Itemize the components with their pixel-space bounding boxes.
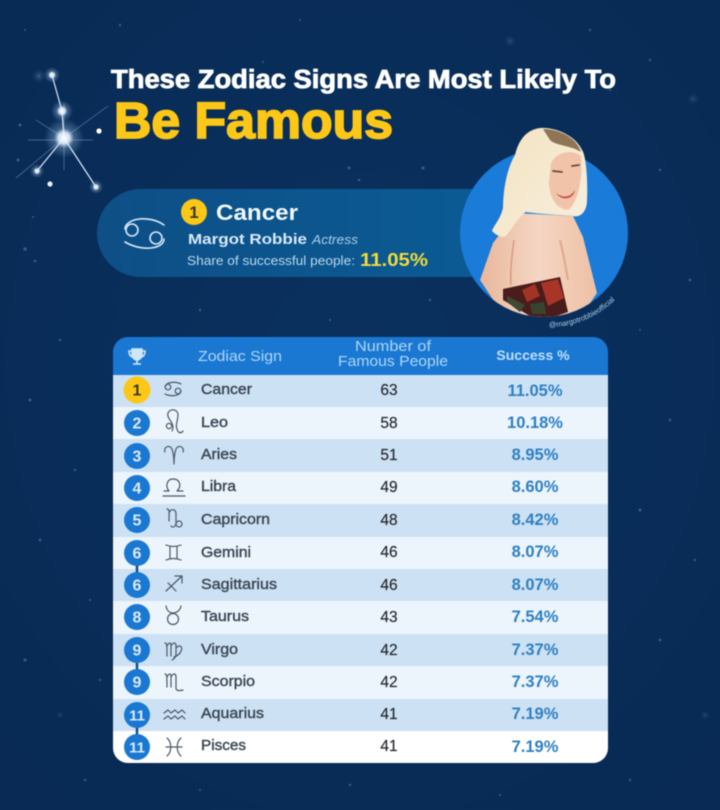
row: scorpio: Scorpio <box>201 674 255 690</box>
icon: trophy <box>129 349 145 364</box>
row: virgo: Virgo <box>201 642 238 658</box>
row: capricorn: Capricorn <box>201 512 270 528</box>
row: capricorn: 5 <box>133 512 142 530</box>
row: cancer: 11.05% <box>507 382 563 400</box>
title line 2: Be Famous <box>114 92 393 149</box>
row: aquarius: 41 <box>380 706 398 723</box>
row: cancer <box>124 376 563 404</box>
row: sagittarius: Sagittarius <box>201 577 277 593</box>
row: gemini: 8.07% <box>512 543 559 561</box>
row: aquarius: Aquarius <box>201 706 264 722</box>
panel: featured sign <box>97 189 517 277</box>
row: capricorn <box>124 507 559 533</box>
face <box>549 152 581 210</box>
row: pisces: 11 <box>129 740 145 756</box>
row: leo: 58 <box>380 415 398 432</box>
row: sagittarius: 46 <box>380 577 398 594</box>
row: aries <box>124 443 559 469</box>
row: leo: 10.18% <box>507 414 563 432</box>
row: taurus: 7.54% <box>512 608 559 626</box>
row: taurus: Taurus <box>201 609 249 625</box>
row: libra: 8.60% <box>512 478 559 496</box>
sign name: Cancer <box>216 200 298 225</box>
title line 1: These Zodiac Signs Are Most Likely To <box>111 66 616 94</box>
row: virgo <box>124 637 559 663</box>
shoulders and dress <box>480 213 597 325</box>
row: aries: Aries <box>201 447 237 463</box>
row: aries: 51 <box>380 447 398 464</box>
header: number of famous people: Number of <box>355 338 432 355</box>
row: capricorn: 8.42% <box>512 511 559 529</box>
row: aries: 3 <box>133 448 142 466</box>
row: scorpio: 42 <box>380 674 398 691</box>
hair <box>492 128 587 237</box>
row: libra: 4 <box>133 480 142 498</box>
row: pisces: 7.19% <box>512 738 559 756</box>
row: virgo: 42 <box>380 642 398 659</box>
row: gemini: Gemini <box>201 545 251 561</box>
share label: Share of successful people: <box>187 253 355 268</box>
table header <box>113 337 608 375</box>
icon: constellation <box>16 67 108 194</box>
row: sagittarius: 6 <box>133 578 142 594</box>
table <box>113 337 608 763</box>
header: success: Success % <box>496 347 570 363</box>
row: sagittarius: 8.07% <box>512 576 559 594</box>
table rows <box>113 337 608 763</box>
person role: Actress <box>311 233 358 247</box>
person name: Margot Robbie <box>188 232 307 248</box>
header: zodiac sign: Zodiac Sign <box>198 349 282 365</box>
hair roots <box>543 129 581 152</box>
row: libra <box>124 475 559 501</box>
row: aquarius <box>124 702 559 728</box>
row: pisces: Pisces <box>201 738 246 754</box>
portrait <box>460 127 629 329</box>
row: pisces: 41 <box>380 738 398 755</box>
icon: cancer <box>125 219 164 248</box>
row: libra: 49 <box>380 479 398 496</box>
row: cancer: Cancer <box>201 382 252 398</box>
row: gemini: 46 <box>380 544 398 561</box>
row: aries: 8.95% <box>512 446 559 464</box>
row: gemini <box>124 540 559 566</box>
row: virgo: 7.37% <box>512 641 559 659</box>
row: taurus <box>124 604 559 630</box>
photo handle: @margotrobbieofficial <box>548 296 615 329</box>
row: taurus: 8 <box>133 610 142 626</box>
row: scorpio: 9 <box>133 674 142 692</box>
row: cancer: 63 <box>380 382 398 399</box>
rank badge: 1 <box>189 203 199 222</box>
row: pisces <box>124 734 559 760</box>
row: aquarius: 7.19% <box>512 705 559 723</box>
row: leo <box>124 410 563 436</box>
header: number of famous people: Famous People <box>338 353 448 370</box>
row: gemini: 6 <box>133 546 142 562</box>
row: cancer: 1 <box>133 382 142 400</box>
row: leo: 2 <box>133 416 142 432</box>
header: number of famous people <box>338 338 448 370</box>
row: sagittarius <box>124 572 559 598</box>
row: taurus: 43 <box>380 609 398 626</box>
row: scorpio: 7.37% <box>512 673 559 691</box>
row: libra: Libra <box>201 479 237 495</box>
row: virgo: 9 <box>133 642 142 660</box>
row: capricorn: 48 <box>380 512 398 529</box>
share value: 11.05% <box>360 250 428 270</box>
rank badge <box>181 199 207 225</box>
row: aquarius: 11 <box>129 708 145 724</box>
row: scorpio <box>124 669 559 695</box>
rank connectors <box>136 552 138 746</box>
row: leo: Leo <box>201 415 228 431</box>
